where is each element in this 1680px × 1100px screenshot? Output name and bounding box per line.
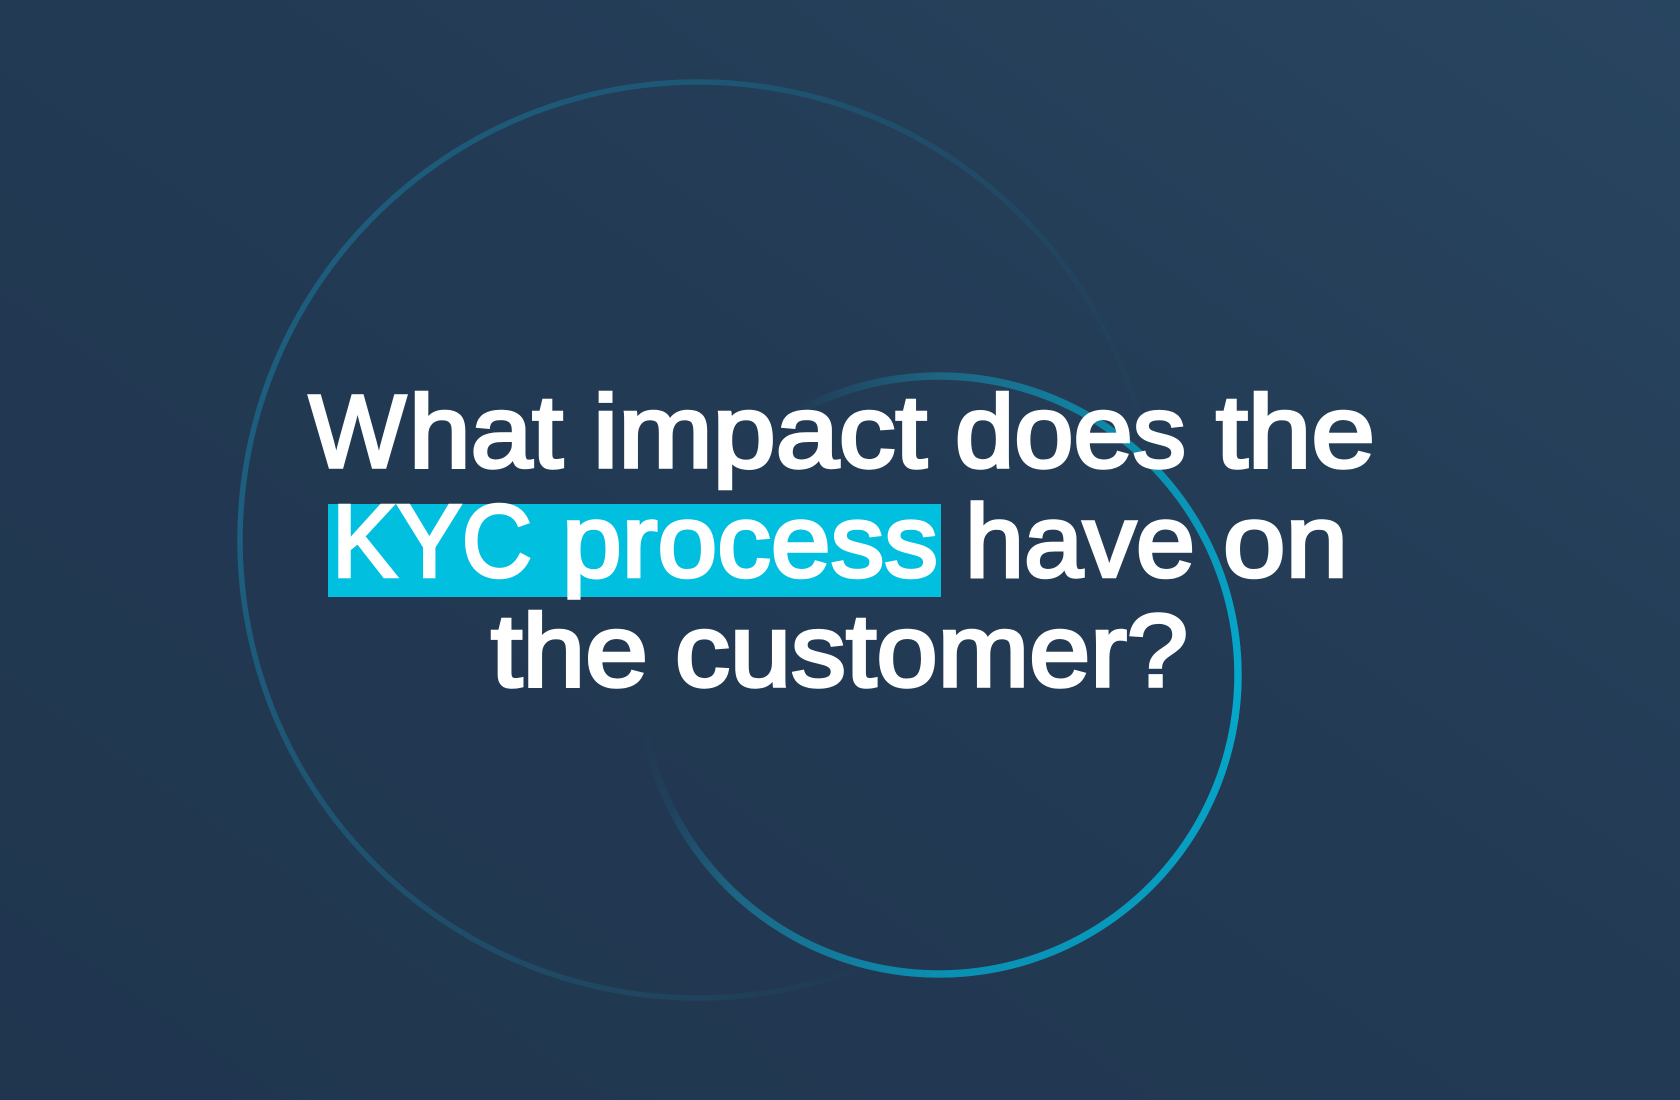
title: line 1: hat (409, 374, 563, 489)
title: line 2: process (562, 484, 938, 598)
title: line 1: W (309, 374, 406, 489)
highlight block behind KYC process (328, 504, 941, 597)
large faint spiral ring (237, 79, 1054, 1000)
title: line 3 (491, 593, 1188, 708)
title: line 3: the (491, 593, 648, 708)
title: line 2: have (965, 484, 1195, 598)
title: line 1: the (1216, 374, 1375, 489)
title: line 2: on (1223, 484, 1348, 598)
title: line 3: customer? (675, 593, 1188, 708)
title: line 1: impact (593, 374, 927, 489)
small bright spiral ring (636, 372, 1242, 978)
title: line 1 (309, 374, 1375, 489)
title: line 2 (332, 484, 1348, 598)
title: line 2: KYC (332, 484, 532, 598)
title: line 1: does (955, 374, 1186, 489)
